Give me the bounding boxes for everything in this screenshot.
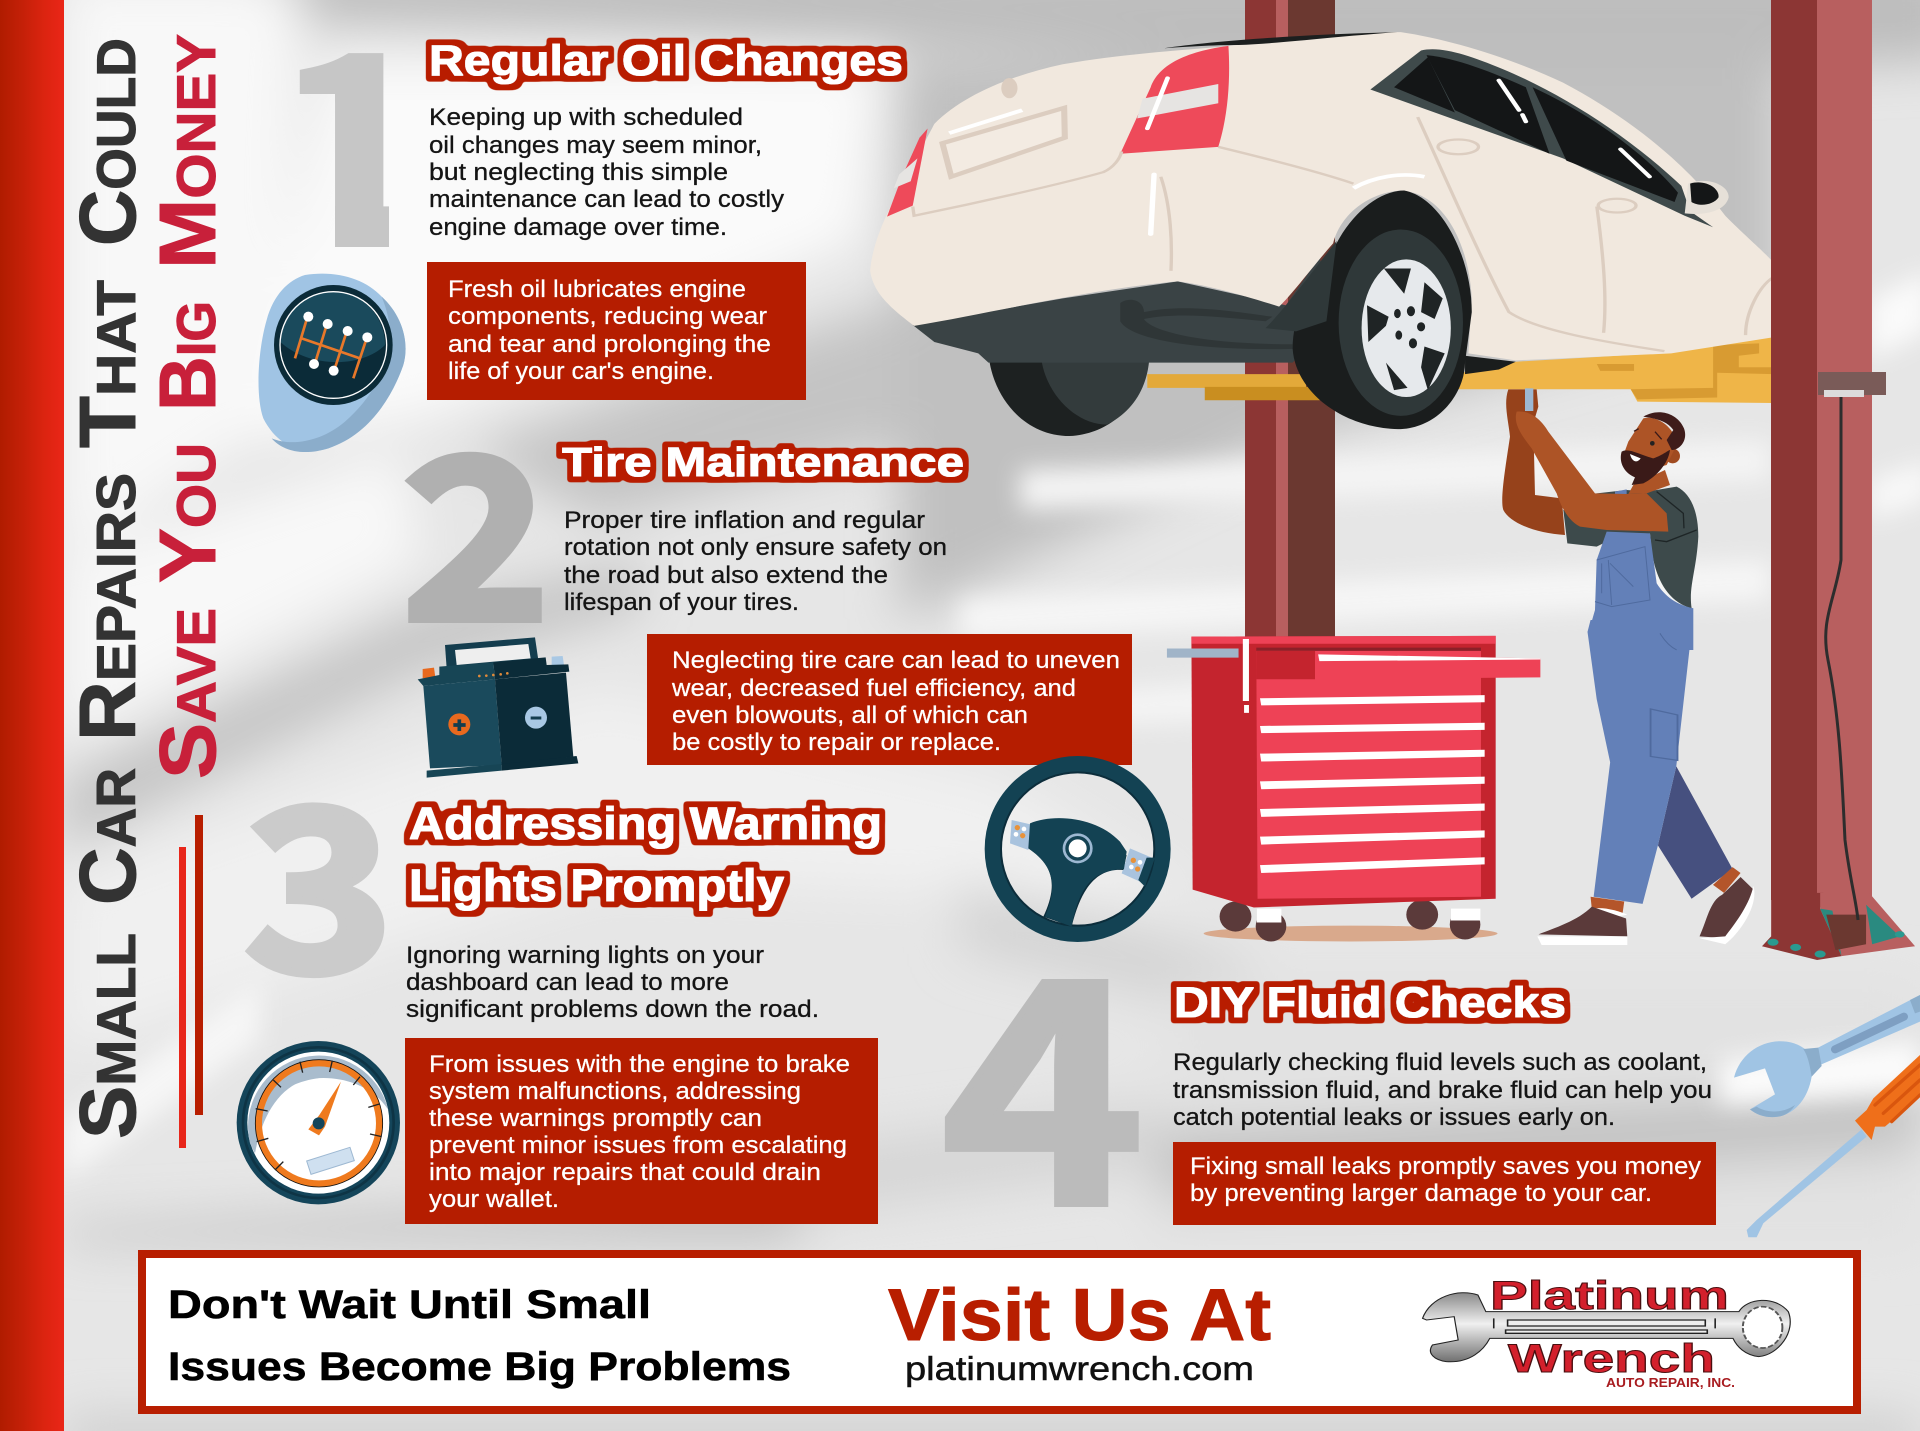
logo: Platinum Wrench: AUTO REPAIR, INC. [1606,1375,1735,1390]
icon: car battery [418,637,578,778]
callout 3: your wallet. [429,1186,559,1213]
windows [1370,49,1713,227]
callout 1: Fresh oil lubricates engine [448,276,746,303]
callout 3: into major repairs that could drain [429,1159,821,1186]
body text 1: engine damage over time. [429,214,727,241]
callout 3 [405,1038,878,1224]
front lift pillar [1762,0,1915,960]
visit us: platinumwrench.com [905,1350,1254,1387]
footer banner [142,1254,1857,1410]
callout 1 [427,262,806,400]
trunk details [913,78,1773,351]
body text 3: Ignoring warning lights on your [406,942,764,969]
body text 2: lifespan of your tires. [564,589,799,616]
body text 3 [406,942,819,1023]
title: Small Car Repairs That Could: THAT [63,280,152,448]
visit us: Visit Us At [888,1275,1271,1356]
body text 1: but neglecting this simple [429,159,728,186]
car on lift [870,32,1773,436]
body text 4: Regularly checking fluid levels such as coolant, [1173,1049,1707,1076]
back lift pillar [1245,0,1335,640]
front arm [1516,411,1668,532]
body text 1: oil changes may seem minor, [429,132,762,159]
overalls bib [1588,532,1693,650]
body text 2: Proper tire inflation and regular [564,507,925,534]
title: Small Car Repairs That Could: CAR [63,768,152,905]
heading: Addressing Warning Lights Promptly [409,798,882,911]
logo: Platinum Wrench: Platinum [1490,1274,1729,1318]
callout 2 [647,634,1132,765]
title: Save You Big Money [143,34,232,779]
title: Small Car Repairs That Could [63,38,152,1139]
callout 3: prevent minor issues from escalating [429,1132,847,1159]
title: Small Car Repairs That Could: REPAIRS [63,473,152,741]
toolbox cabinet [1191,636,1496,907]
callout 2: be costly to repair or replace. [672,729,1001,756]
logo: Platinum Wrench [1423,1274,1790,1390]
callout 2: Neglecting tire care can lead to uneven [672,647,1120,674]
body text 4: catch potential leaks or issues early on. [1173,1104,1615,1131]
body text 2: rotation not only ensure safety on [564,534,947,561]
callout 4: by preventing larger damage to your car. [1190,1180,1652,1207]
footer slogan: Don't Wait Until Small [168,1283,651,1327]
car underside [913,257,1333,363]
body text 4 [1173,1049,1712,1131]
yellow lift arm [1147,336,1773,403]
open tray [1315,654,1540,679]
callout 4: Fixing small leaks promptly saves you money [1190,1153,1701,1180]
toolbox shadow [1204,926,1498,941]
title: Save You Big Money: YOU [143,443,232,583]
body text 2 [564,507,947,616]
tail lights [887,46,1229,217]
numeral 3: 3 [244,711,394,1036]
numeral 4: 4 [941,847,1145,1293]
icon: steering wheel [993,764,1162,934]
body text 2: the road but also extend the [564,562,888,589]
callout 1: and tear and prolonging the [448,331,771,358]
callout 2: wear, decreased fuel efficiency, and [671,675,1076,702]
drawer highlights [1260,695,1485,873]
title accent lines [179,815,203,1148]
title: Save You Big Money: BIG [143,301,232,411]
head [1621,412,1685,485]
car body [870,32,1773,360]
rear far wheel [988,353,1149,436]
icon: screwdriver [1747,1055,1920,1237]
numeral 2: 2 [402,361,550,683]
body text 1: Keeping up with scheduled [429,104,743,131]
callout 4 [1173,1142,1716,1225]
neck [1628,470,1670,494]
back arm [1502,389,1565,535]
pillar base [1762,893,1915,960]
switch box and cable [1818,372,1886,395]
body text 3: dashboard can lead to more [406,969,729,996]
title: Save You Big Money: SAVE [143,608,232,779]
heading: DIY Fluid Checks: DIY Fluid Checks [1174,979,1566,1027]
body text 1: maintenance can lead to costly [429,186,784,213]
callout 1: life of your car's engine. [448,358,714,385]
toolbox [1167,636,1540,941]
footer slogan: Issues Become Big Problems [168,1345,791,1389]
title: Small Car Repairs That Could: COULD [63,38,152,246]
footer slogan [168,1283,791,1389]
callout 2: even blowouts, all of which can [672,702,1028,729]
heading: Tire Maintenance: Tire Maintenance [562,439,964,485]
body text 4: transmission fluid, and brake fluid can help you [1173,1077,1712,1104]
callout 3: these warnings promptly can [429,1105,762,1132]
icon: gauge [237,1041,400,1204]
heading: Regular Oil Changes: Regular Oil Changes [429,37,903,85]
mechanic upper body [1502,388,1698,650]
heading: Addressing Warning Lights Promptly: Addressing Warning [409,798,882,849]
title: Save You Big Money: MONEY [143,34,232,269]
handle [1167,648,1239,658]
left red strip [0,0,64,1431]
callout 3: From issues with the engine to brake [429,1051,850,1078]
mechanic [1502,388,1754,945]
title: Small Car Repairs That Could: SMALL [63,933,152,1139]
shirt [1563,487,1698,608]
callout 3: system malfunctions, addressing [429,1078,801,1105]
logo: Platinum Wrench: Wrench [1508,1337,1715,1381]
mechanic legs and shoes [1537,620,1754,945]
icon: wrench [1734,995,1920,1117]
visit us [888,1275,1271,1387]
dark roof sliver [1164,32,1397,48]
body text 1 [429,104,784,241]
main rear wheel [1266,190,1472,429]
body text 3: significant problems down the road. [406,996,819,1023]
icon: gear knob [259,274,406,452]
side mirror [1685,181,1729,214]
heading: Addressing Warning Lights Promptly: Lights Promptly [409,860,784,911]
toolbox wheels [1220,900,1480,941]
callout 1: components, reducing wear [448,303,767,330]
